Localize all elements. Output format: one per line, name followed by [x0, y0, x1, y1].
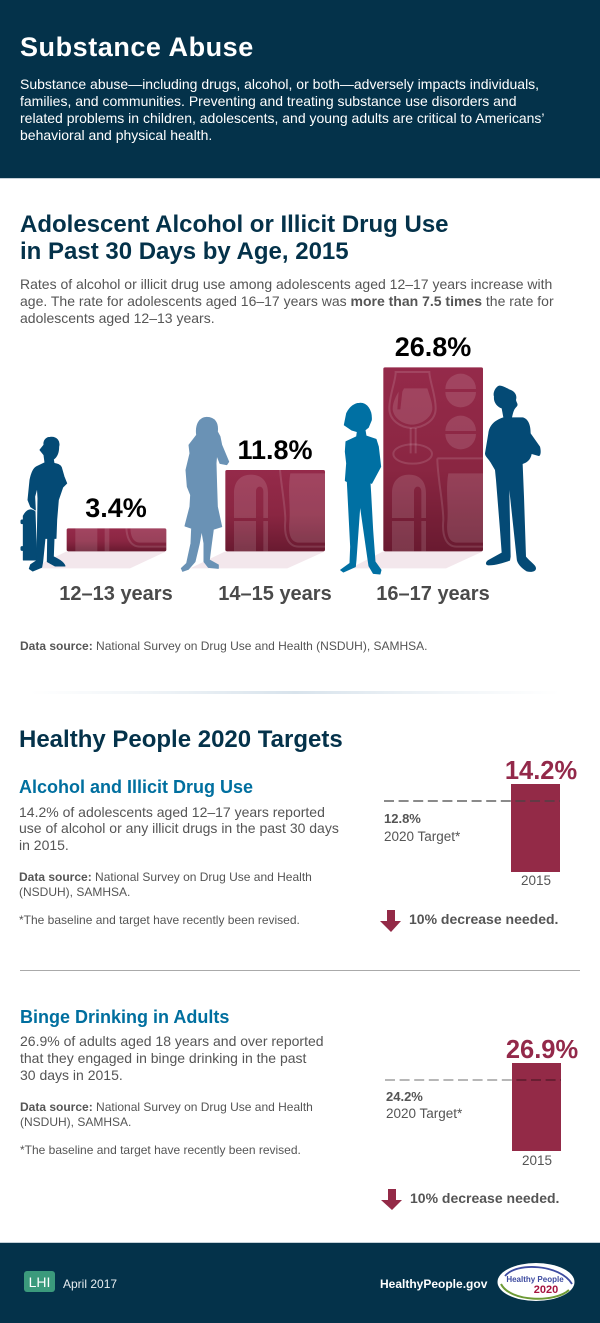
target chart: alcohol and illicit drug use: [380, 757, 577, 932]
target chart: binge drinking: 2015: [522, 1153, 552, 1168]
bar: 14-15 years: [190, 470, 325, 568]
age labels: [59, 583, 490, 605]
values: 26.8%: [395, 332, 471, 362]
heading: adolescent use: in Past 30 Days by Age, 2015: [20, 238, 349, 265]
intro text: behavioral and physical health.: [20, 127, 212, 143]
age labels: 16–17 years: [376, 583, 490, 605]
heading: adolescent use: Adolescent Alcohol or Illicit Drug Use: [20, 211, 449, 238]
data source: (NSDUH), SAMHSA.: [19, 885, 130, 899]
intro text: Substance abuse—including drugs, alcohol, or both—adversely impacts individuals,: [20, 76, 539, 92]
data source: [19, 870, 312, 899]
icon: young man: [485, 386, 541, 572]
target chart: binge drinking: 26.9%: [506, 1036, 578, 1064]
arrow: decrease: [381, 1189, 402, 1210]
chart description: age. The rate for adolescents aged 16–17 years was more than 7.5 times the rate for: [20, 293, 554, 309]
logo: Healthy People 2020: [498, 1263, 574, 1301]
description: [20, 1033, 324, 1083]
description: in 2015.: [19, 837, 69, 853]
title: Substance Abuse: [20, 32, 254, 62]
target chart: binge drinking: [381, 1036, 578, 1210]
values: [85, 332, 471, 523]
icon: young woman: [341, 403, 381, 574]
LHI badge: LHI: [29, 1274, 50, 1290]
target chart: alcohol and illicit drug use: 2020 Target*: [384, 829, 461, 844]
target chart: binge drinking: 24.2%: [386, 1089, 423, 1104]
heading: targets: Healthy People 2020 Targets: [19, 726, 343, 753]
chart description: Rates of alcohol or illicit drug use among adolescents aged 12–17 years increase with: [20, 276, 552, 292]
values: 3.4%: [85, 493, 147, 523]
target chart: alcohol and illicit drug use: 14.2%: [505, 757, 577, 785]
target chart: alcohol and illicit drug use: 10% decrease needed.: [409, 911, 558, 927]
target chart: alcohol and illicit drug use: 2015: [521, 873, 551, 888]
chart description: adolescents aged 12–13 years.: [20, 310, 215, 326]
data source: (NSDUH), SAMHSA.: [20, 1115, 131, 1129]
bar: 16-17 years: [350, 367, 483, 568]
bar: 12-13 years: [40, 528, 166, 568]
description: that they engaged in binge drinking in the past: [20, 1050, 307, 1066]
data source: Data source: National Survey on Drug Use and Health: [19, 870, 312, 884]
data source: Data source: National Survey on Drug Use and Health: [20, 1100, 313, 1114]
footnote: *The baseline and target have recently been revised.: [20, 1143, 301, 1157]
chart description: [20, 276, 554, 326]
description: 30 days in 2015.: [20, 1067, 123, 1083]
website: HealthyPeople.gov: [380, 1277, 488, 1291]
footer: [0, 1242, 600, 1323]
description: use of alcohol or any illicit drugs in the past 30 days: [19, 820, 339, 836]
age labels: 14–15 years: [218, 583, 332, 605]
data source: chart: Data source: National Survey on Drug Use and Health (NSDUH), SAMHSA.: [20, 639, 428, 653]
intro text: related problems in children, adolescents, and young adults are critical to Americans’: [20, 110, 545, 126]
panel: alcohol and illicit drug use: [19, 777, 339, 927]
footnote: *The baseline and target have recently been revised.: [19, 913, 300, 927]
date: April 2017: [63, 1277, 117, 1291]
subheading: Binge Drinking in Adults: [20, 1007, 229, 1027]
logo: Healthy People 2020: Healthy People: [506, 1275, 564, 1284]
panel: binge drinking: [20, 1007, 324, 1157]
age labels: 12–13 years: [59, 583, 173, 605]
subheading: Alcohol and Illicit Drug Use: [19, 777, 253, 797]
target chart: binge drinking: 10% decrease needed.: [410, 1190, 559, 1206]
description: 26.9% of adults aged 18 years and over reported: [20, 1033, 324, 1049]
header band: [0, 0, 600, 179]
intro text: [20, 76, 545, 143]
icon: girl on phone: [181, 417, 229, 571]
target chart: alcohol and illicit drug use: 12.8%: [384, 811, 421, 826]
arrow: decrease: [380, 910, 401, 932]
bar chart by age: [21, 332, 541, 605]
data source: [20, 1100, 313, 1129]
LHI badge: [24, 1271, 55, 1292]
heading: adolescent use: [20, 211, 449, 265]
target chart: binge drinking: 2020 Target*: [386, 1106, 463, 1121]
intro text: families, and communities. Preventing and treating substance use disorders and: [20, 93, 516, 109]
icon: boy with skateboard: [21, 437, 67, 571]
description: 14.2% of adolescents aged 12–17 years reported: [19, 804, 325, 820]
logo: Healthy People 2020: 2020: [534, 1284, 558, 1296]
values: 11.8%: [237, 435, 313, 465]
description: [19, 804, 339, 853]
